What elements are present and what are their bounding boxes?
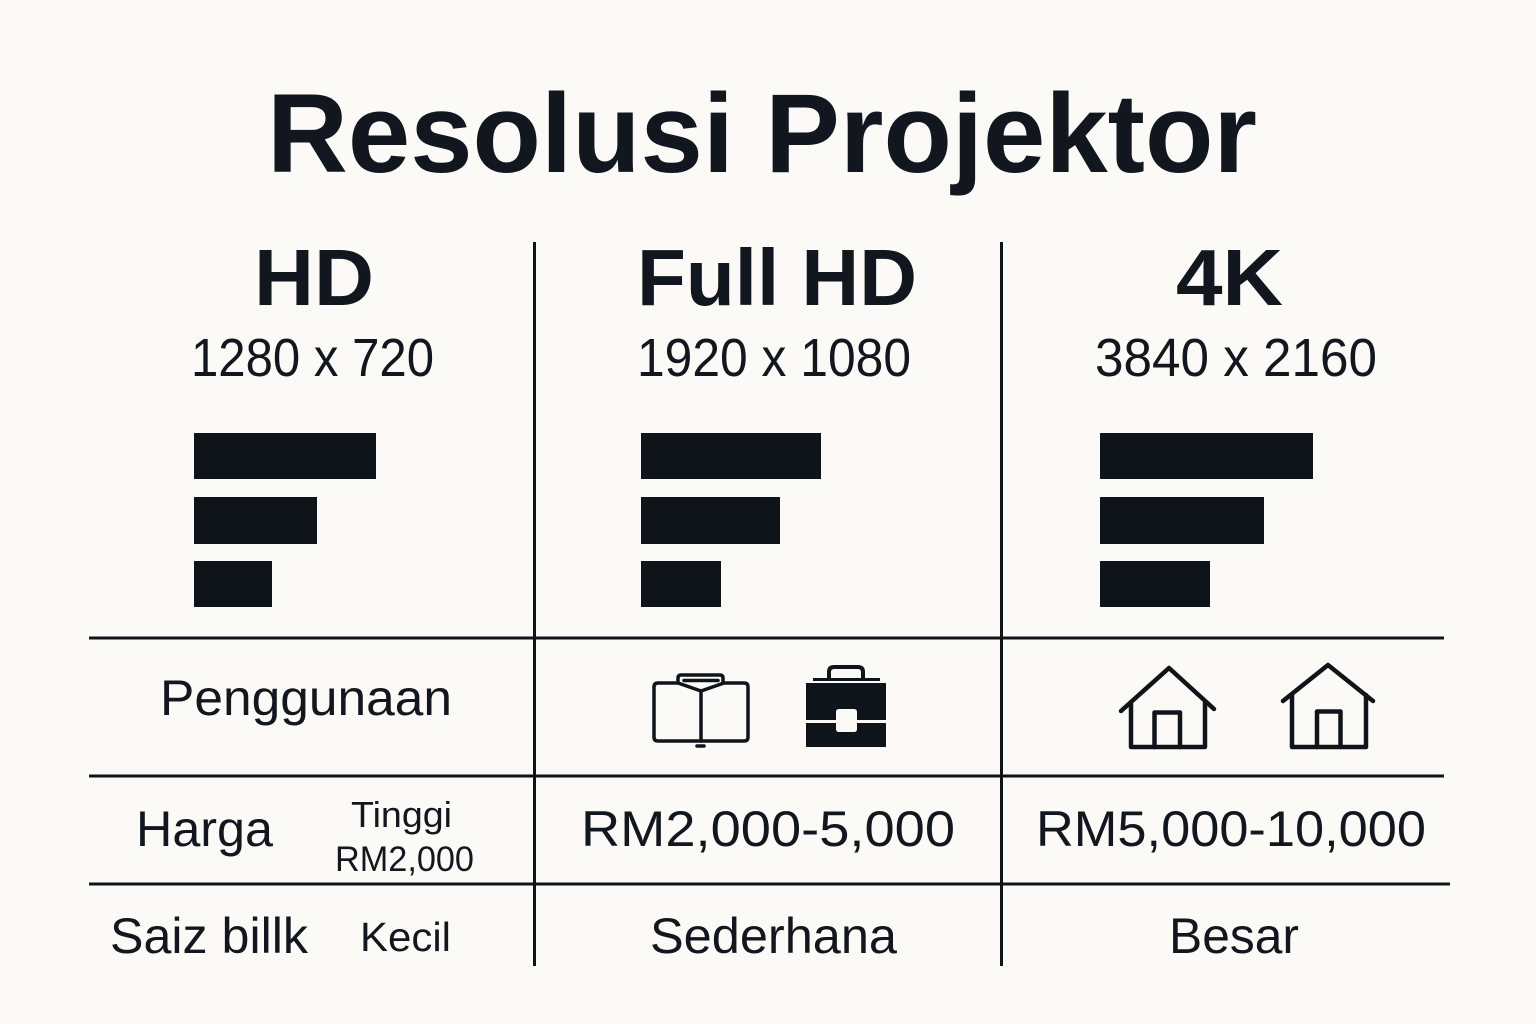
text: Full HD price: RM2,000-5,000: [581, 801, 955, 857]
text: HD price: Tinggi: [351, 794, 452, 835]
panel: HD: [191, 233, 434, 607]
icon: open book: [654, 675, 748, 746]
label: Harga: Harga: [136, 801, 273, 857]
title: Resolusi Projektor: [267, 71, 1257, 196]
icon: briefcase: [806, 667, 886, 747]
bar chart: 4K: [1100, 433, 1313, 607]
label: Penggunaan: Penggunaan: [160, 670, 452, 726]
row: Saiz billk: [110, 908, 1299, 964]
icon: house left: [1121, 668, 1214, 747]
heading: Full HD: Full HD: [637, 233, 917, 322]
label: Saiz billk: Saiz billk: [110, 908, 309, 964]
bar chart: HD: [194, 433, 376, 607]
text: Full HD size: Sederhana: [650, 908, 897, 964]
text: 4K size: Besar: [1169, 908, 1299, 964]
heading: 4K: 4K: [1176, 233, 1283, 322]
icon: house right: [1283, 665, 1373, 747]
bar chart: Full HD: [641, 433, 821, 607]
row: Penggunaan: [160, 665, 1373, 747]
panel: Full HD: [637, 233, 917, 607]
panel: 4K: [1095, 233, 1377, 607]
heading: HD: HD: [254, 233, 374, 322]
text: 4K resolution: 3840 x 2160: [1095, 328, 1377, 388]
text: HD price: [335, 794, 474, 879]
text: HD size: Kecil: [360, 914, 451, 960]
text: 4K price: RM5,000-10,000: [1036, 801, 1426, 857]
text: HD resolution: 1280 x 720: [191, 328, 434, 388]
row: Harga: [136, 794, 1426, 879]
text: Full HD resolution: 1920 x 1080: [637, 328, 911, 388]
text: HD price: RM2,000: [335, 840, 474, 879]
